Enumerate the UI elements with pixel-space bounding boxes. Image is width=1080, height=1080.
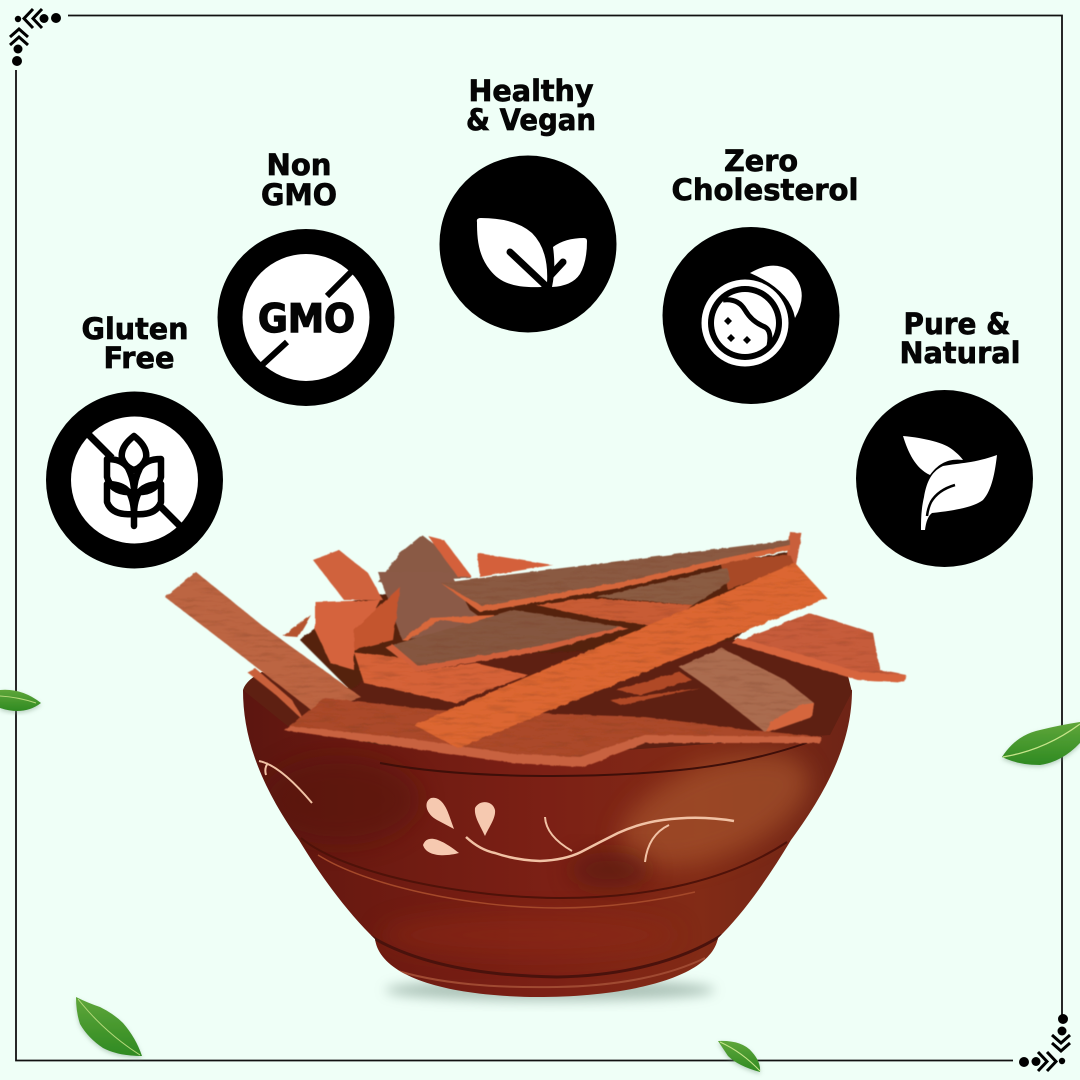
badge: healthy and vegan <box>440 156 616 332</box>
badge: pure and natural <box>856 390 1033 567</box>
label: Zero Cholesterol: Zero <box>724 144 798 178</box>
icon: two leaves <box>903 436 997 530</box>
label: Non GMO: GMO <box>261 178 337 212</box>
icon: GMO text: GMO <box>258 297 355 342</box>
leaf: right edge <box>1002 722 1080 765</box>
badge: non GMO <box>218 229 394 406</box>
label: Non GMO: Non <box>266 148 332 182</box>
icon: wheat <box>107 436 161 526</box>
label: Pure & Natural: Pure & <box>904 307 1010 341</box>
leaf: bottom left <box>76 997 142 1056</box>
label: Gluten Free: Gluten <box>82 312 188 346</box>
label: Pure & Natural: Natural <box>900 336 1020 370</box>
label: Gluten Free: Free <box>104 341 174 375</box>
label: Non GMO <box>261 148 337 212</box>
icon: sprout leaves <box>477 218 587 287</box>
cinnamon bowl with bark <box>165 532 906 997</box>
bowl inlay <box>259 761 734 862</box>
label: Zero Cholesterol: Cholesterol <box>672 173 858 207</box>
label: Gluten Free <box>82 312 188 375</box>
corner ornament: bottom right <box>1019 1014 1070 1071</box>
label: Pure & Natural <box>900 307 1020 370</box>
badge: zero cholesterol <box>662 227 840 404</box>
corner ornament: top left <box>10 9 61 66</box>
label: Zero Cholesterol <box>672 144 858 207</box>
leaf: bottom centre <box>718 1041 760 1072</box>
bark backing <box>300 552 790 690</box>
label: Healthy & Vegan: & Vegan <box>466 103 596 137</box>
label: Healthy & Vegan: Healthy <box>468 74 594 108</box>
bowl interior <box>243 630 852 752</box>
bark pieces <box>165 532 906 767</box>
badge: gluten free <box>46 392 223 568</box>
leaf: left edge <box>0 690 41 711</box>
label: Healthy & Vegan <box>466 74 596 137</box>
bowl shadow <box>385 979 715 1001</box>
icon: cholesterol artery <box>702 266 802 366</box>
bowl body <box>243 690 852 997</box>
